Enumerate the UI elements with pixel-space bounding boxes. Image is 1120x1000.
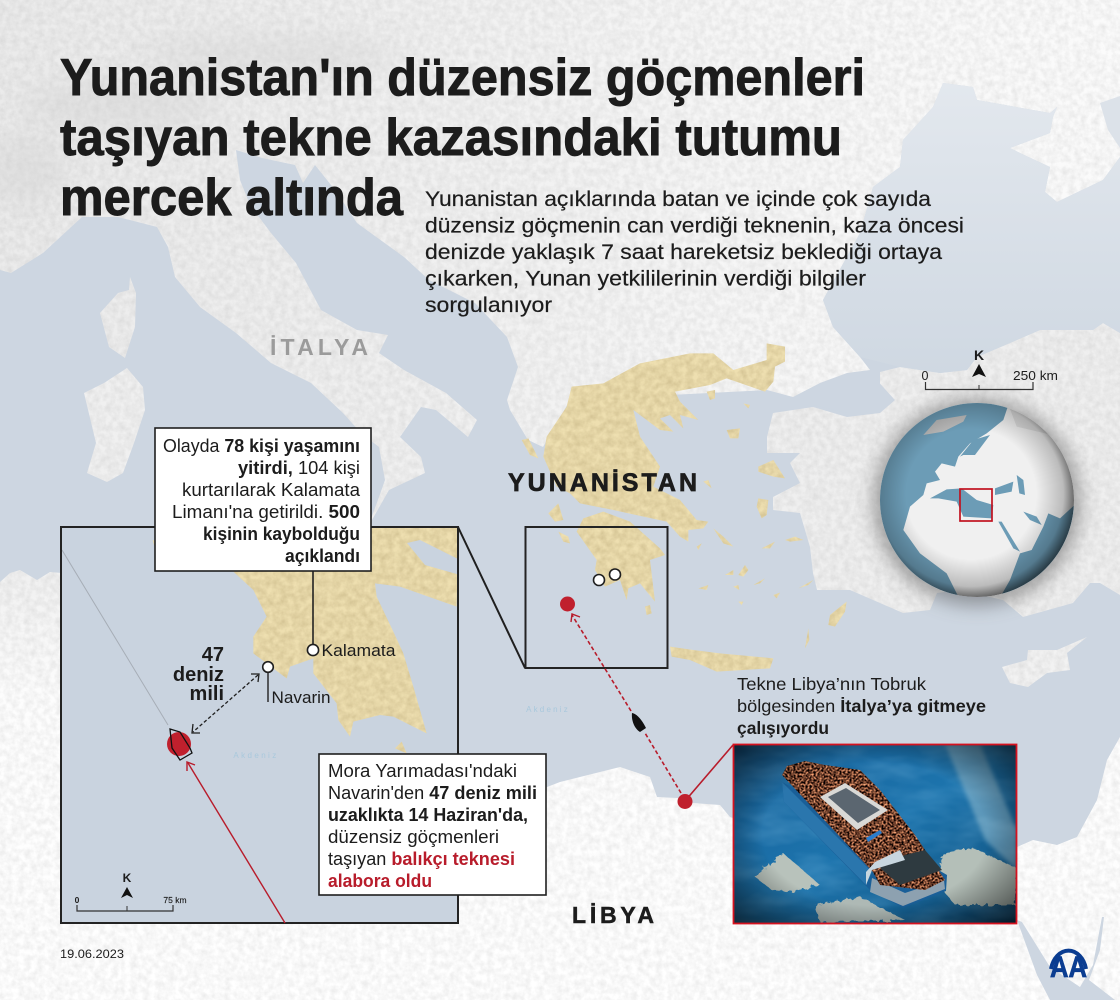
callout: capsizing: düzensiz göçmenleri [328, 827, 499, 847]
subtitle: denizde yaklaşık 7 saat hareketsiz beklediği ortaya [425, 241, 942, 264]
title [60, 49, 865, 227]
inset map panel: Mora [61, 527, 460, 923]
marker: Kalamata [307, 571, 396, 660]
land: Africa and Levant [0, 570, 1120, 1000]
scale bar: inset: K [123, 871, 132, 885]
land: Europe and Italy [0, 0, 1120, 527]
sea label: Akdeniz: Akdeniz [526, 705, 570, 714]
country label: Libya: LİBYA [572, 902, 654, 928]
connector: inset lines [458, 527, 525, 668]
distance label: 47 deniz mili: 47 [202, 644, 224, 666]
callout: casualties: Olayda 78 kişi yaşamını [163, 436, 360, 456]
arrow: dashed distance [192, 674, 259, 733]
date: 19.06.2023 [60, 947, 124, 961]
scale bar: inset: 75 km [163, 895, 187, 905]
land: Corsica and Sardinia [84, 277, 145, 482]
callout: casualties: açıklandı [285, 546, 360, 566]
sea: Azov [1100, 96, 1120, 148]
scale bar: main: 0 [922, 369, 929, 383]
country label: İtalya: İTALYA [270, 334, 368, 360]
callout: casualties [155, 428, 371, 571]
scale bar: inset [75, 871, 187, 911]
callout: capsizing: Mora Yarımadası'ndaki [328, 761, 517, 781]
country: Greece [522, 343, 847, 672]
origin point: Tobruk [678, 745, 733, 809]
sea: Red Sea gulfs [1017, 917, 1115, 1000]
small inset locator box [526, 527, 668, 668]
marker: Navarin [263, 662, 330, 707]
photo caption: Tobruk: bölgesinden İtalya’ya gitmeye [737, 696, 986, 716]
callout: casualties: Limanı'na getirildi. 500 [172, 502, 360, 522]
title: Yunanistan'ın düzensiz göçmenleri [60, 49, 865, 107]
country label: Yunanistan: YUNANİSTAN [508, 469, 697, 497]
title: taşıyan tekne kazasındaki tutumu [60, 109, 842, 167]
subtitle: düzensiz göçmenin can verdiği teknenin, kaza öncesi [425, 214, 964, 238]
sea label inset: Akdeniz: Akdeniz [233, 751, 279, 760]
distance label: 47 deniz mili [173, 644, 224, 705]
arrow: red route in inset [187, 762, 285, 923]
relief: Alps shading [0, 33, 400, 206]
subtitle: sorgulanıyor [425, 294, 552, 317]
land: Turkey [767, 323, 1120, 617]
route: dashed red line with boat [571, 614, 681, 793]
scale bar: inset: 0 [75, 895, 80, 905]
distance label: 47 deniz mili: mili [190, 683, 224, 705]
marker: Kalamata: Kalamata [322, 642, 396, 660]
sea: Marmara [793, 375, 893, 413]
scale bar: main: 250 km [1013, 369, 1058, 383]
land: Cyprus [1002, 637, 1087, 687]
callout: capsizing: Navarin'den 47 deniz mili [328, 783, 537, 803]
callout: casualties: kurtarılarak Kalamata [182, 480, 361, 500]
subtitle [425, 188, 964, 317]
photo: overcrowded fishing boat [733, 744, 1017, 924]
logo: Anadolu Agency: AA [1050, 951, 1087, 984]
scale bar: main: K [974, 347, 984, 363]
callout: capsizing: taşıyan balıkçı teknesi [328, 849, 515, 869]
globe shadow [873, 398, 1081, 606]
locator globe [880, 403, 1074, 597]
scale bar: main [922, 347, 1058, 390]
marker: wreck site with boat [167, 729, 192, 760]
callout: capsizing [319, 754, 546, 895]
subtitle: Yunanistan açıklarında batan ve içinde çok sayıda [425, 188, 931, 211]
photo caption: Tobruk: çalışıyordu [737, 718, 829, 738]
title: mercek altında [60, 169, 404, 227]
distance label: 47 deniz mili: deniz [173, 664, 224, 686]
callout: casualties: yitirdi, 104 kişi [238, 458, 360, 478]
marker: Navarin: Navarin [272, 689, 330, 707]
callout: capsizing: uzaklıkta 14 Haziran'da, [328, 805, 528, 825]
subtitle: çıkarken, Yunan yetkililerinin verdiği bilgiler [425, 268, 866, 290]
photo caption: Tobruk: Tekne Libya’nın Tobruk [737, 674, 926, 694]
callout: capsizing: alabora oldu [328, 871, 432, 891]
photo caption: Tobruk [737, 674, 986, 738]
callout: casualties: kişinin kaybolduğu [203, 524, 360, 544]
sea: Black Sea [823, 83, 1120, 373]
